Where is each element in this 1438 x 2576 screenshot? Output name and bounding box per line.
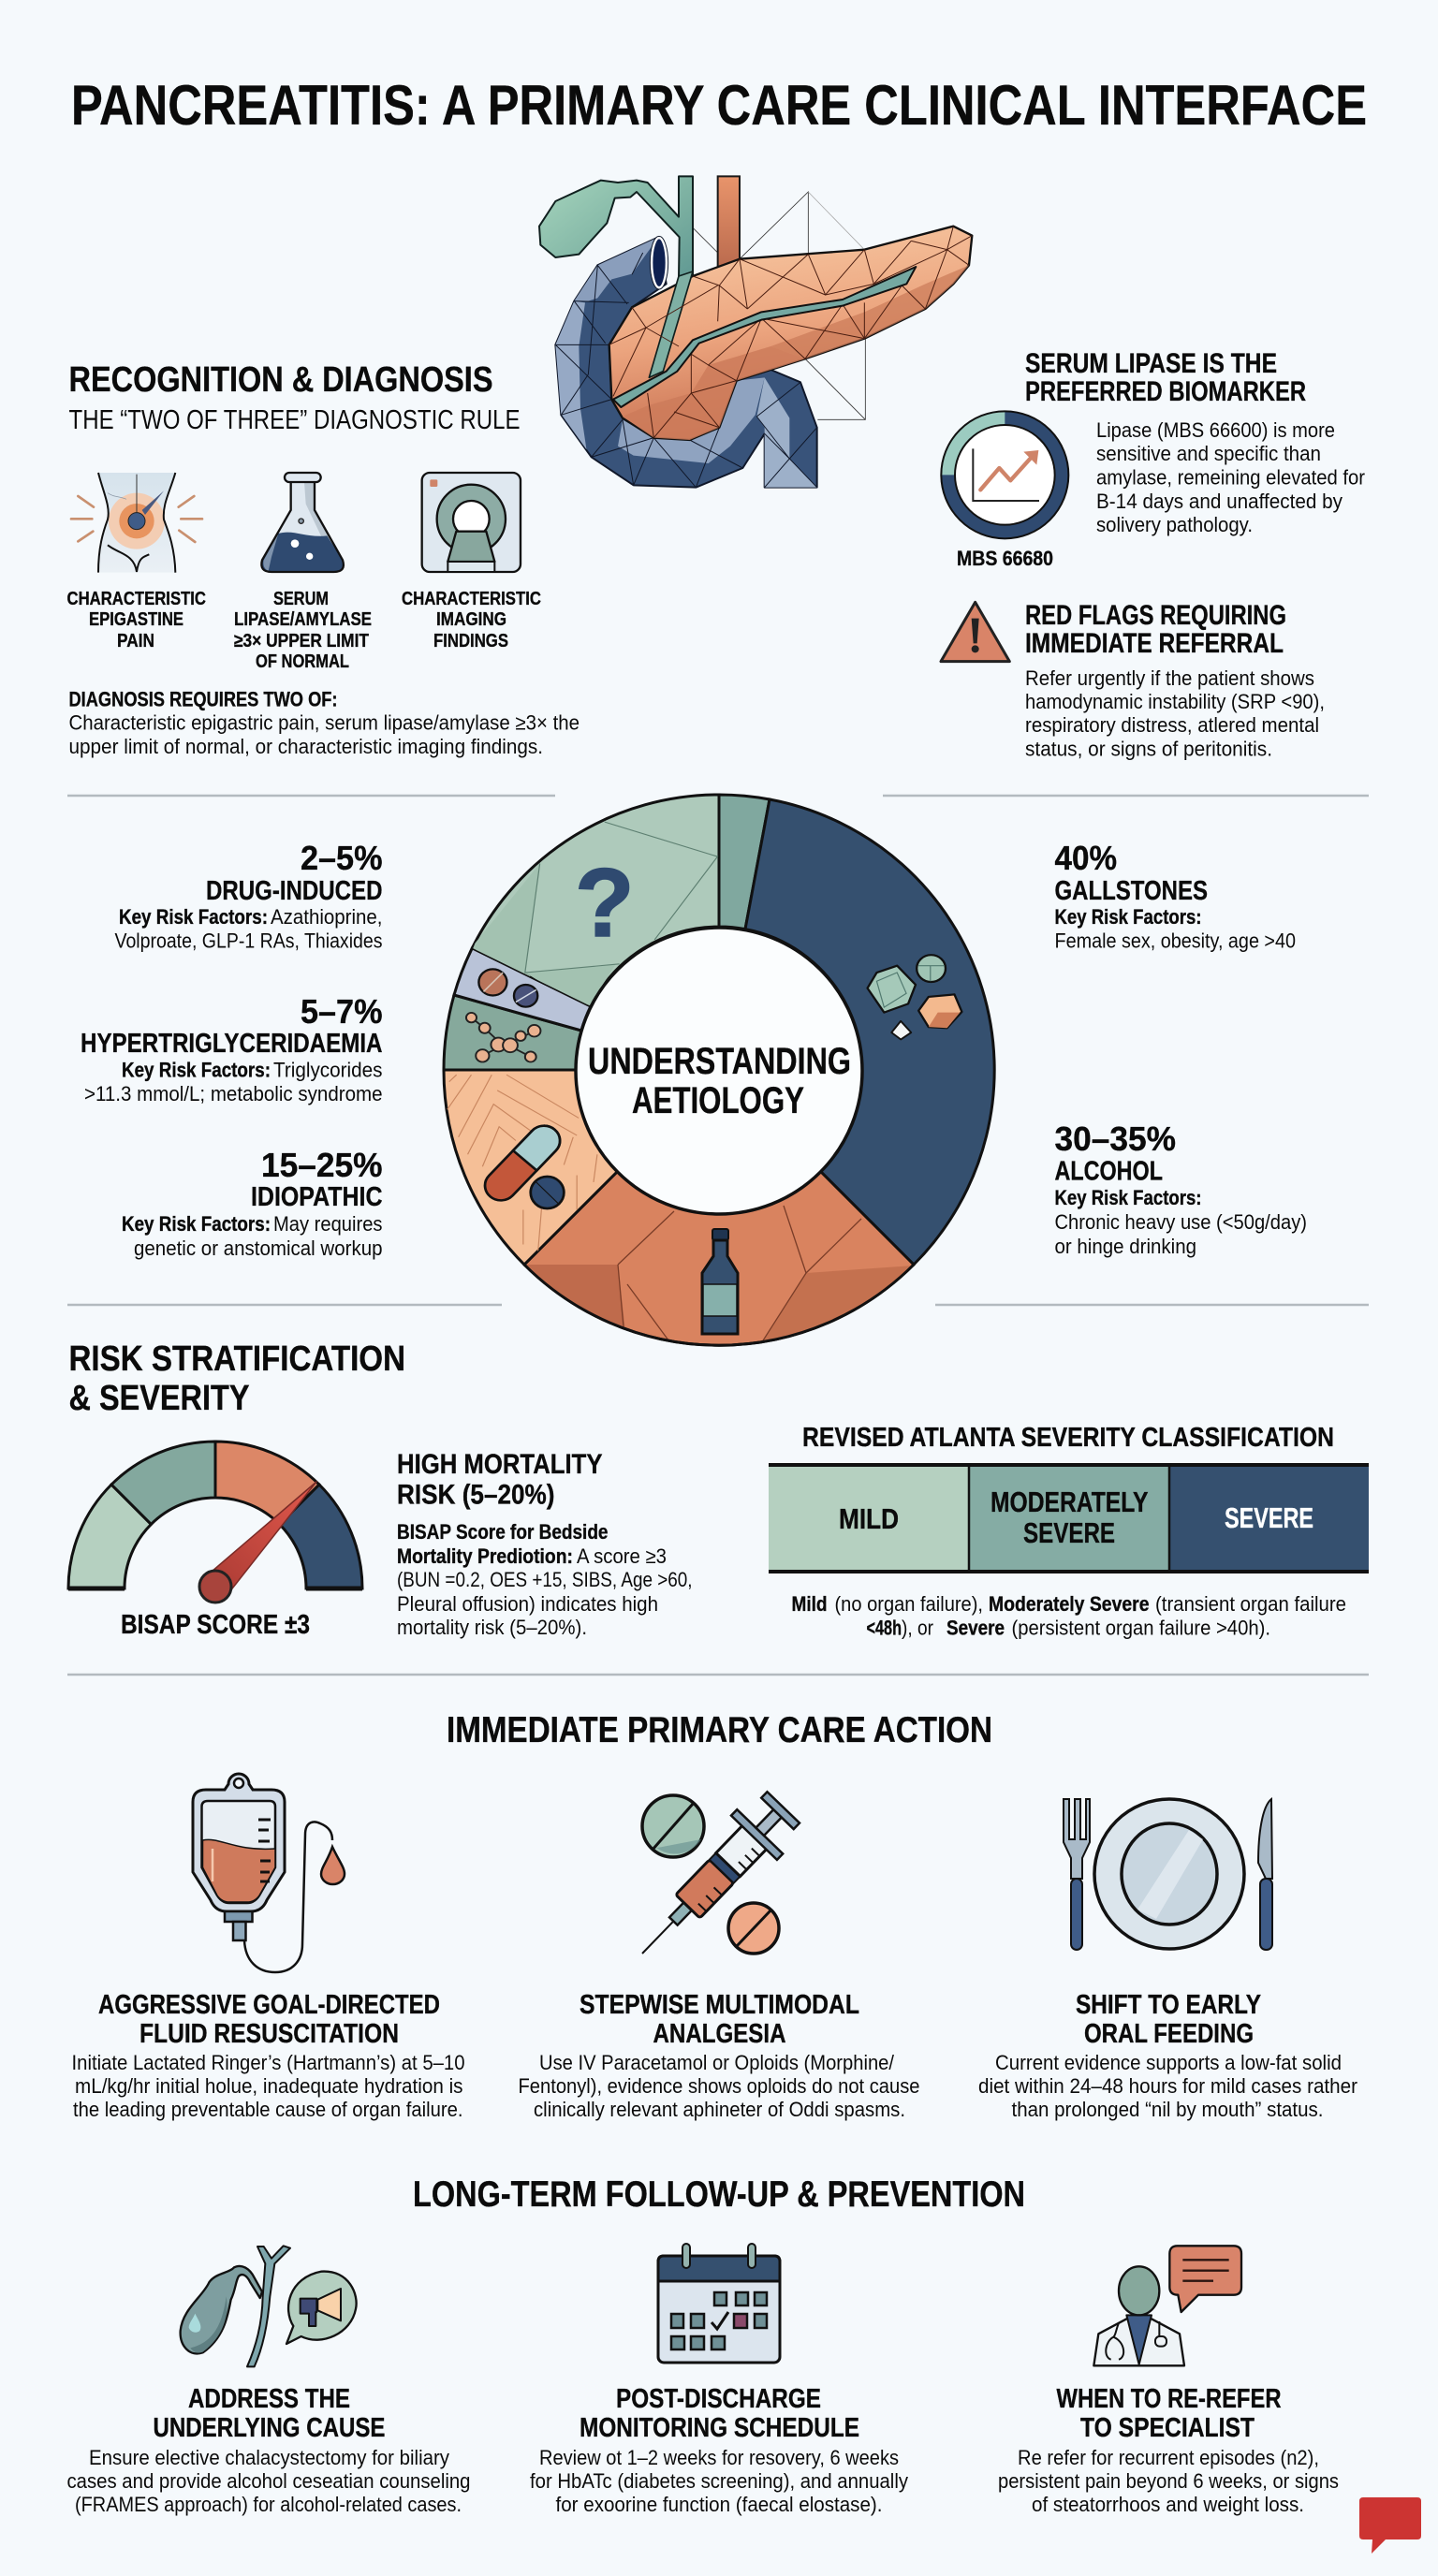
text block: lipase explanation <box>1096 418 1365 536</box>
slice: hypertriglyceridaemia <box>444 995 581 1070</box>
text block: analgesia <box>519 2051 919 2121</box>
text block: severity definitions: <48h <box>867 1616 902 1640</box>
text block: severity definitions: Mild <box>792 1592 828 1616</box>
callout: idiopathic: May requires <box>273 1212 382 1236</box>
callout: gallstones <box>1054 839 1296 953</box>
heading: stepwise multimodal <box>580 1990 859 2049</box>
callout: idiopathic: IDIOPATHIC <box>251 1182 383 1212</box>
text block: diagnosis requires two of <box>69 687 580 758</box>
centre label: AETIOLOGY <box>632 1080 804 1121</box>
text block: re-referral <box>998 2446 1339 2516</box>
text block: referral criteria: status, or signs of peritonitis. <box>1025 738 1272 760</box>
caption: characteristic epigastine pain: PAIN <box>117 631 154 651</box>
heading: high mortality risk: RISK (5–20%) <box>397 1479 554 1511</box>
heading: revised atlanta classification: REVISED ATLANTA SEVERITY CLASSIFICATION <box>802 1423 1334 1453</box>
caption: characteristic imaging findings: FINDINGS <box>433 631 508 651</box>
text block: severity definitions: Moderately Severe <box>989 1592 1150 1616</box>
slice: idiopathic <box>444 1070 618 1265</box>
heading: address the underlying cause: UNDERLYING CAUSE <box>154 2413 386 2443</box>
column: oral feeding <box>978 1799 1357 2121</box>
heading: aggressive goal-directed <box>98 1990 440 2049</box>
text block: monitoring schedule: for exoorine function (faecal elostase). <box>556 2493 882 2516</box>
text block: severity definitions <box>792 1592 1346 1640</box>
panel: risk stratification and severity <box>68 1339 1369 1640</box>
callout: drug-induced <box>114 839 382 953</box>
heading: long-term follow-up and prevention: LONG-TERM FOLLOW-UP & PREVENTION <box>413 2174 1025 2215</box>
callout: drug-induced: 2–5% <box>301 839 382 877</box>
text block: BISAP explanation: A score ≥3 <box>577 1544 667 1568</box>
text block: analgesia: clinically relevant aphineter of Oddi spasms. <box>534 2098 905 2121</box>
text block: monitoring schedule: for HbATc (diabetes screening), and annually <box>530 2469 908 2493</box>
icon: IV bag <box>193 1774 345 1972</box>
text block: referral criteria: respiratory distress, atlered mental <box>1025 713 1319 737</box>
panel: red flags <box>941 600 1325 760</box>
callout: hypertriglyceridaemia: Key Risk Factors: <box>122 1058 271 1082</box>
severity bar: SEVERE <box>1023 1516 1115 1549</box>
centre hole <box>576 928 862 1214</box>
text block: re-referral: persistent pain beyond 6 weeks, or signs <box>998 2469 1339 2493</box>
heading: red flags <box>1025 600 1286 659</box>
caption: serum lipase/amylase: OF NORMAL <box>256 651 349 672</box>
icon: alcohol bottle <box>702 1229 738 1334</box>
text block: BISAP explanation: (BUN =0.2, OES +15, SIBS, Age >60, <box>397 1568 693 1591</box>
label: MBS code: MBS 66680 <box>957 547 1053 570</box>
heading: when to re-refer: WHEN TO RE-REFER <box>1056 2384 1282 2414</box>
text block: re-referral: of steatorrhoos and weight loss. <box>1032 2493 1304 2516</box>
icon: lipid molecule <box>466 1013 540 1062</box>
slice: gallstones <box>745 799 994 1265</box>
caption: serum lipase/amylase <box>234 589 372 672</box>
gauge: BISAP score <box>68 1442 362 1603</box>
heading: address the underlying cause: ADDRESS THE <box>188 2384 350 2414</box>
icon: red speech callout <box>1359 2497 1421 2554</box>
text block: fluid resuscitation: Initiate Lactated Ringer’s (Hartmann’s) at 5–10 <box>71 2051 464 2074</box>
caption: characteristic imaging findings: CHARACTERISTIC <box>402 589 541 609</box>
icon: plate fork and knife <box>1064 1799 1272 1950</box>
heading: address the underlying cause <box>154 2384 386 2443</box>
icon: drug capsule and tablet <box>478 1120 566 1208</box>
heading: when to re-refer: TO SPECIALIST <box>1080 2413 1255 2443</box>
callout: hypertriglyceridaemia: HYPERTRIGLYCERIDAEMIA <box>81 1029 383 1059</box>
column: underlying cause <box>67 2246 470 2516</box>
text block: fluid resuscitation: mL/kg/hr initial holue, inadequate hydration is <box>75 2074 462 2098</box>
text block: lipase explanation: B-14 days and unaffected by <box>1096 490 1343 513</box>
icon: gallbladder and megaphone bubble <box>181 2246 357 2366</box>
callout: alcohol: Key Risk Factors: <box>1054 1186 1202 1209</box>
heading: shift to early oral feeding <box>1076 1990 1261 2049</box>
text block: monitoring schedule: Review ot 1–2 weeks for resovery, 6 weeks <box>539 2446 899 2469</box>
column: when to re-refer <box>998 2246 1339 2516</box>
text block: referral criteria: hamodynamic instability (SRP <90), <box>1025 690 1325 713</box>
subheading: two of three rule: THE “TWO OF THREE” DIAGNOSTIC RULE <box>69 405 521 435</box>
text block: diagnosis requires two of: DIAGNOSIS REQUIRES TWO OF: <box>69 687 337 711</box>
text block: fluid resuscitation: the leading preventable cause of organ failure. <box>73 2098 462 2121</box>
severity bar: SEVERE <box>1225 1501 1313 1534</box>
icon: gallstones <box>868 955 961 1039</box>
heading: high mortality risk: HIGH MORTALITY <box>397 1449 603 1480</box>
heading: post-discharge monitoring <box>580 2384 859 2443</box>
caption: serum lipase/amylase: ≥3× UPPER LIMIT <box>234 631 369 651</box>
heading: post-discharge monitoring: MONITORING SCHEDULE <box>580 2413 859 2443</box>
text block: oral feeding: diet within 24–48 hours for mild cases rather <box>978 2074 1357 2098</box>
icon: doctor with speech bubble <box>1093 2246 1241 2365</box>
heading: risk stratification <box>69 1339 405 1418</box>
caption: characteristic epigastine pain: CHARACTERISTIC <box>67 589 206 609</box>
text block: fluid resuscitation <box>71 2051 464 2121</box>
heading: serum lipase: SERUM LIPASE IS THE <box>1025 348 1277 379</box>
panel: serum lipase biomarker <box>941 348 1365 570</box>
callout: hypertriglyceridaemia <box>81 992 383 1105</box>
callout: drug-induced: DRUG-INDUCED <box>206 876 382 906</box>
caption: serum lipase/amylase: LIPASE/AMYLASE <box>234 609 372 630</box>
column: analgesia <box>519 1785 919 2121</box>
text block: BISAP explanation: BISAP Score for Bedside <box>397 1520 609 1544</box>
text block: lipase explanation: amylase, remeining elevated for <box>1096 466 1365 489</box>
callout: alcohol: Chronic heavy use (<50g/day) <box>1054 1210 1307 1234</box>
column: fluid resuscitation <box>71 1774 464 2121</box>
heading: post-discharge monitoring: POST-DISCHARGE <box>616 2384 821 2414</box>
icon: warning triangle <box>941 602 1009 662</box>
text block: diagnosis requires two of: upper limit of normal, or characteristic imaging findings. <box>69 735 543 758</box>
text block: severity definitions: (persistent organ failure >40h). <box>1011 1616 1270 1640</box>
caption: characteristic epigastine pain: EPIGASTINE <box>89 609 183 630</box>
heading: red flags: RED FLAGS REQUIRING <box>1025 600 1286 631</box>
text block: referral criteria <box>1025 666 1325 760</box>
text block: underlying cause: cases and provide alcohol ceseatian counseling <box>67 2469 470 2493</box>
slice: alcohol <box>524 1171 914 1348</box>
centre label <box>588 1041 851 1121</box>
callout: alcohol: or hinge drinking <box>1054 1235 1196 1258</box>
callout: alcohol <box>1054 1120 1307 1258</box>
caption: serum lipase/amylase: SERUM <box>273 589 329 609</box>
callout: gallstones: 40% <box>1054 839 1117 877</box>
text block: underlying cause: Ensure elective chalacystectomy for biliary <box>89 2446 449 2469</box>
caption: characteristic epigastine pain <box>67 589 206 651</box>
centre label: UNDERSTANDING <box>588 1041 851 1082</box>
illustration: pancreas anatomy <box>539 176 972 488</box>
column: monitoring schedule <box>530 2244 908 2516</box>
heading: recognition and diagnosis: RECOGNITION & DIAGNOSIS <box>69 360 492 400</box>
callout: alcohol: ALCOHOL <box>1054 1157 1163 1187</box>
text block: monitoring schedule <box>530 2446 908 2516</box>
text block: BISAP explanation: mortality risk (5–20%). <box>397 1616 587 1639</box>
icon: tablets <box>478 969 537 1007</box>
text block: lipase explanation: sensitive and specific than <box>1096 442 1321 465</box>
callout: idiopathic: genetic or anstomical workup <box>134 1237 382 1260</box>
icon: epigastric pain <box>71 473 202 573</box>
heading: risk stratification: RISK STRATIFICATION <box>69 1339 405 1379</box>
text block: lipase explanation: Lipase (MBS 66600) is more <box>1096 418 1335 442</box>
heading: aggressive goal-directed: FLUID RESUSCITATION <box>139 2019 399 2049</box>
icon: biomarker ring with rising chart <box>941 411 1068 538</box>
callout: gallstones: Key Risk Factors: <box>1054 905 1202 929</box>
text block: diagnosis requires two of: Characteristic epigastric pain, serum lipase/amylase ≥3× the <box>69 711 580 734</box>
heading: high mortality risk <box>397 1449 603 1511</box>
text block: severity definitions: ), or <box>902 1616 933 1640</box>
icon: lab flask <box>261 473 344 572</box>
text block: analgesia: Fentonyl), evidence shows oploids do not cause <box>519 2074 919 2098</box>
slice: drug-induced <box>454 948 591 1031</box>
caption: characteristic imaging findings <box>402 589 541 651</box>
text block: BISAP explanation: Mortality Prediotion: <box>397 1544 573 1568</box>
callout: idiopathic: 15–25% <box>261 1146 382 1184</box>
callout: hypertriglyceridaemia: Triglycorides <box>273 1058 382 1082</box>
icon: syringe and tablets <box>620 1785 806 1976</box>
callout: drug-induced: Volproate, GLP-1 RAs, Thiaxides <box>114 929 382 953</box>
label: BISAP score: BISAP SCORE ±3 <box>121 1610 310 1640</box>
callout: idiopathic: Key Risk Factors: <box>122 1212 271 1236</box>
text block: re-referral: Re refer for recurrent episodes (n2), <box>1018 2446 1319 2469</box>
text block: oral feeding: than prolonged “nil by mouth” status. <box>1011 2098 1324 2121</box>
callout: alcohol: 30–35% <box>1054 1120 1176 1158</box>
text block: underlying cause <box>67 2446 470 2516</box>
heading: red flags: IMMEDIATE REFERRAL <box>1025 628 1284 659</box>
heading: shift to early oral feeding: ORAL FEEDING <box>1084 2019 1254 2049</box>
text block: oral feeding <box>978 2051 1357 2121</box>
text block: severity definitions: (no organ failure), <box>835 1592 983 1616</box>
heading: risk stratification: & SEVERITY <box>69 1379 249 1418</box>
icon: question mark: ? <box>575 849 635 958</box>
text block: lipase explanation: solivery pathology. <box>1096 513 1253 536</box>
icon: calendar <box>658 2244 780 2363</box>
callout: hypertriglyceridaemia: >11.3 mmol/L; metabolic syndrome <box>84 1082 382 1105</box>
heading: serum lipase <box>1025 348 1306 407</box>
text block: severity definitions: (transient organ failure <box>1155 1592 1346 1616</box>
heading: shift to early oral feeding: SHIFT TO EARLY <box>1076 1990 1261 2020</box>
text block: severity definitions: Severe <box>946 1616 1005 1640</box>
text block: referral criteria: Refer urgently if the patient shows <box>1025 666 1314 690</box>
callout: drug-induced: Azathioprine, <box>271 905 382 929</box>
heading: when to re-refer <box>1056 2384 1282 2443</box>
slice: small top teal <box>719 795 770 929</box>
gauge needle <box>199 1482 316 1603</box>
severity bar: MILD <box>839 1502 899 1535</box>
text block: oral feeding: Current evidence supports a low-fat solid <box>995 2051 1342 2074</box>
caption: characteristic imaging findings: IMAGING <box>436 609 506 630</box>
slice: unknown light green <box>453 795 719 1006</box>
panel: recognition and diagnosis <box>67 360 580 758</box>
text block: underlying cause: (FRAMES approach) for alcohol-related cases. <box>75 2493 462 2516</box>
callout: gallstones: Female sex, obesity, age >40 <box>1054 929 1296 953</box>
text block: analgesia: Use IV Paracetamol or Oploids (Morphine/ <box>539 2051 895 2074</box>
callout: hypertriglyceridaemia: 5–7% <box>301 992 382 1031</box>
text block: BISAP explanation: Pleural offusion) indicates high <box>397 1592 658 1616</box>
heading: stepwise multimodal: STEPWISE MULTIMODAL <box>580 1990 859 2020</box>
heading: stepwise multimodal: ANALGESIA <box>653 2019 786 2049</box>
heading: aggressive goal-directed: AGGRESSIVE GOAL-DIRECTED <box>98 1990 440 2020</box>
text block: BISAP explanation <box>397 1520 693 1639</box>
donut chart: aetiology <box>444 795 994 1348</box>
heading: immediate primary care action: IMMEDIATE PRIMARY CARE ACTION <box>447 1710 992 1750</box>
icon: imaging scanner <box>422 473 521 572</box>
heading: serum lipase: PREFERRED BIOMARKER <box>1025 376 1306 407</box>
callout: drug-induced: Key Risk Factors: <box>119 905 268 929</box>
callout: idiopathic <box>122 1146 383 1260</box>
callout: gallstones: GALLSTONES <box>1054 876 1208 906</box>
severity bar: MODERATELY <box>990 1486 1149 1518</box>
severity bar <box>769 1465 1369 1572</box>
